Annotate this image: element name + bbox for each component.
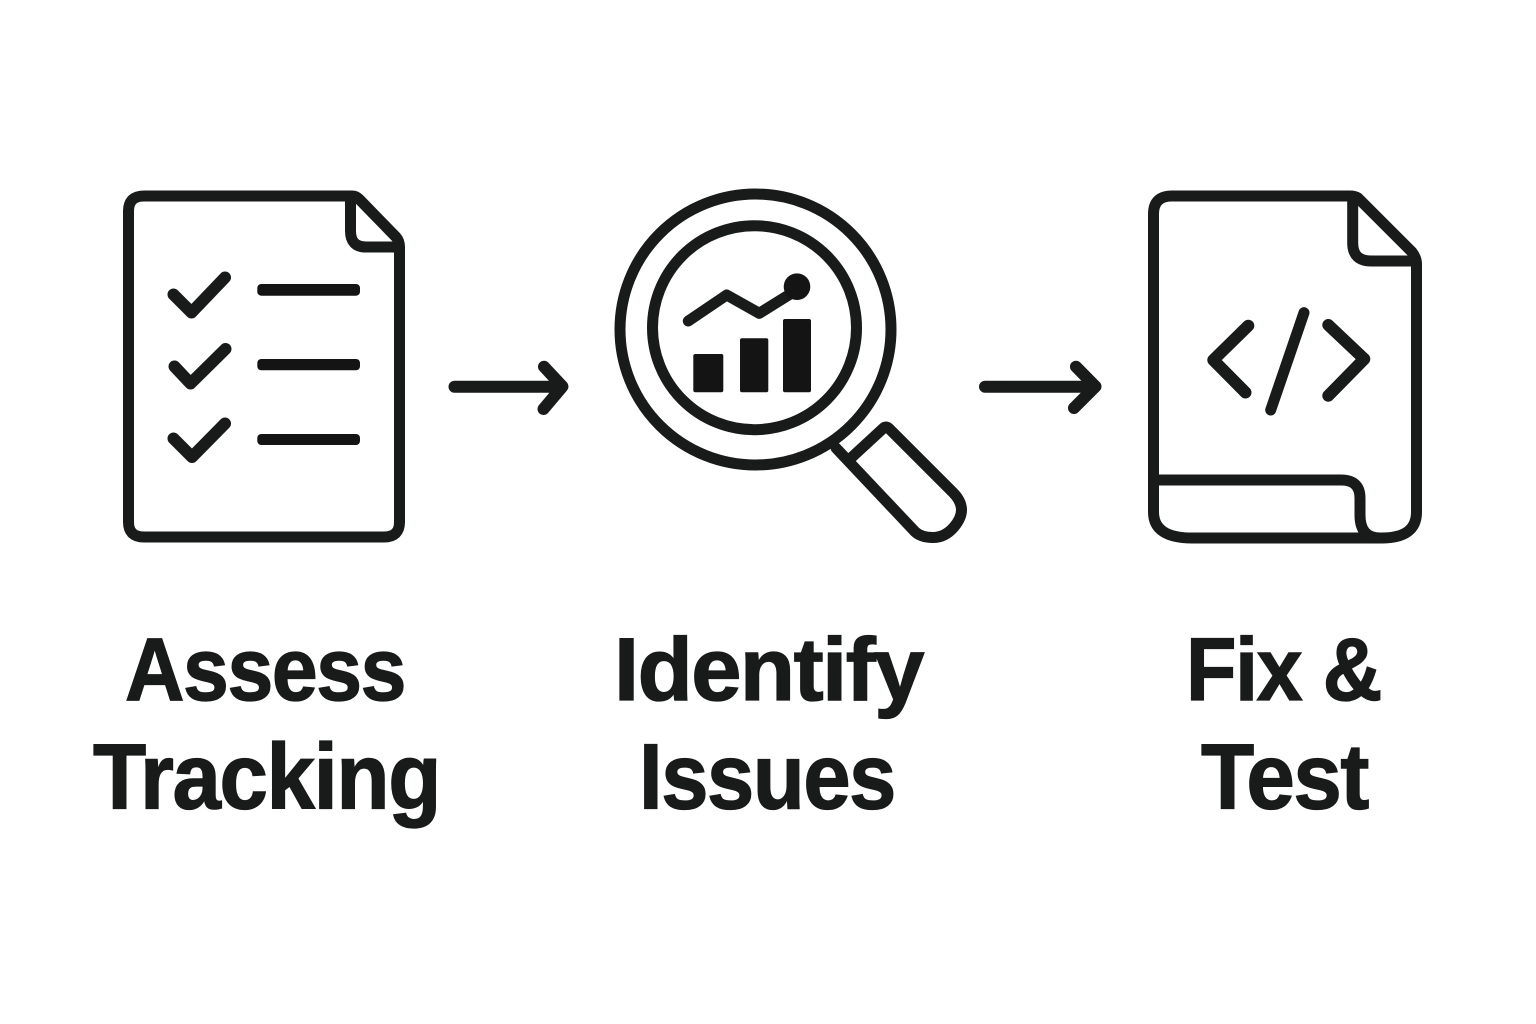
label: Identify Issues [614, 619, 925, 828]
arrow: step one to two [454, 367, 562, 409]
label: Identify Issues: Issues [639, 724, 895, 828]
label: Assess Tracking: Assess [125, 619, 405, 719]
label: Fix & Test: Test [1201, 724, 1368, 828]
label: Fix & Test [1186, 619, 1381, 828]
label: Fix & Test: Fix & [1186, 619, 1381, 719]
icon: checklist document [128, 196, 400, 537]
label: Assess Tracking: Tracking [93, 724, 440, 828]
label: Identify Issues: Identify [614, 619, 925, 719]
label: Assess Tracking [93, 619, 440, 828]
arrow: step two to three [985, 367, 1096, 408]
icon: code document [1154, 196, 1416, 538]
icon: magnifying glass with chart [620, 194, 962, 538]
